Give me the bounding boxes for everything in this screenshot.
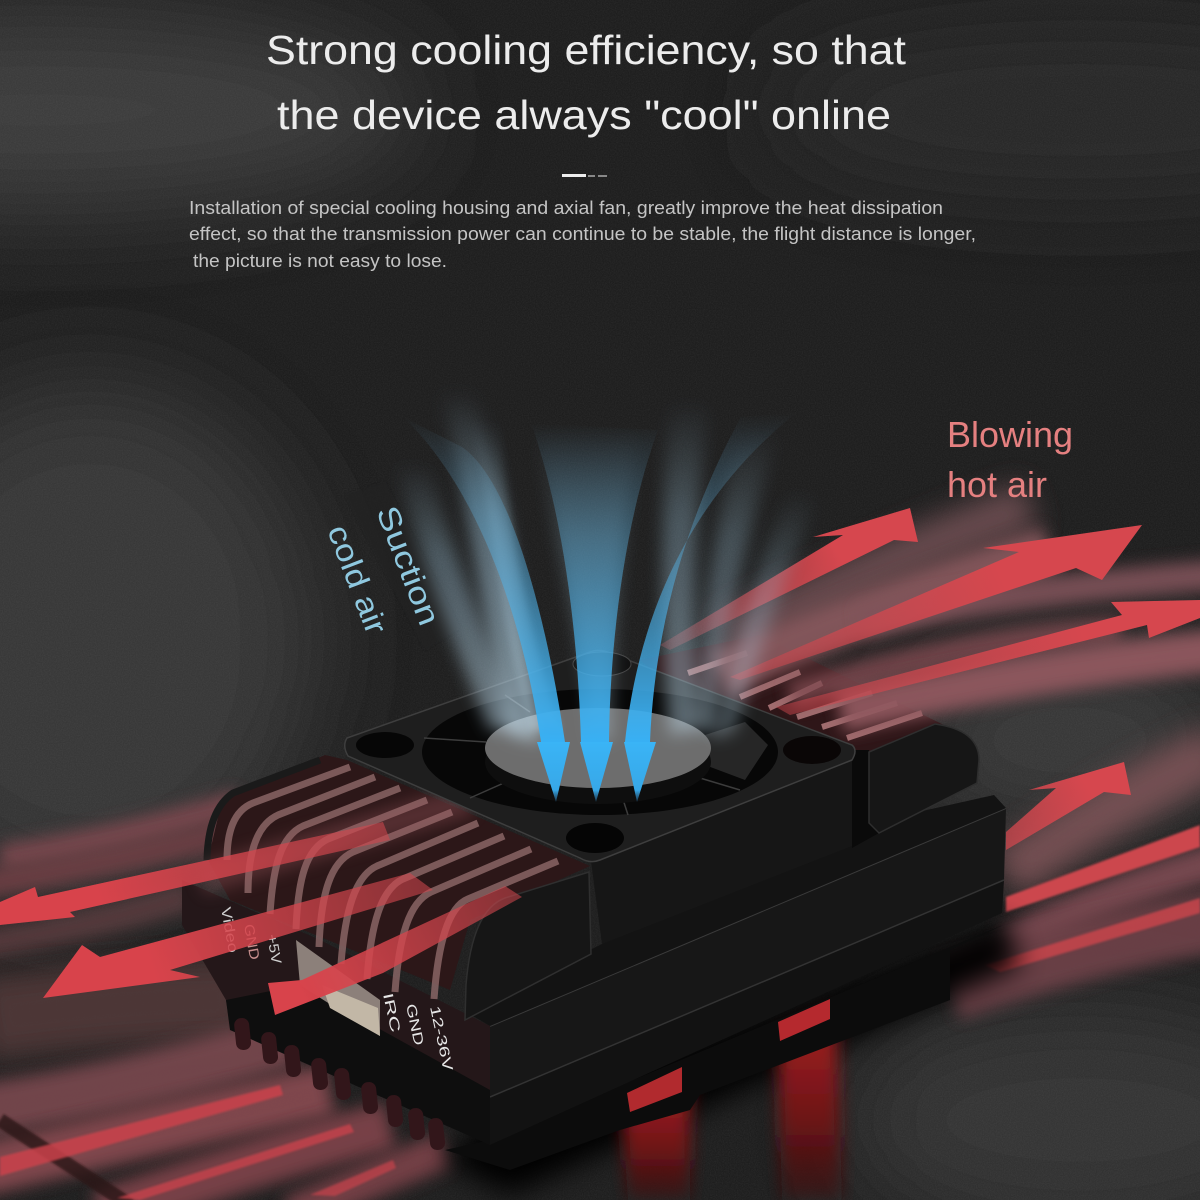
fan front side xyxy=(591,761,852,944)
left front face xyxy=(182,880,490,1151)
title xyxy=(266,27,907,138)
heatsink: back fins xyxy=(640,635,950,760)
side wall block xyxy=(465,872,591,1020)
port labels: IRC xyxy=(380,991,404,1034)
arrow: hot air left 3 xyxy=(268,886,522,1015)
arrow head middle xyxy=(580,742,613,802)
pink air veil over fins xyxy=(200,800,470,880)
arrow: hot air 3 xyxy=(776,600,1200,715)
rear rounded block xyxy=(869,724,979,833)
red glow: under pad 2 xyxy=(778,1010,842,1200)
description text xyxy=(189,197,976,271)
cold air flow: blue arrows xyxy=(403,413,796,802)
description text: effect, so that the transmission power can continue to be stable, the flight distance is longer, xyxy=(189,223,976,244)
arrow: hot air 2 xyxy=(730,525,1142,680)
arrow shaft middle xyxy=(531,423,658,742)
red glow: under pad 1 xyxy=(622,1080,690,1200)
red pad 2 xyxy=(778,999,830,1041)
suction cold air label xyxy=(320,501,447,639)
blowing hot air label xyxy=(947,414,1073,505)
connector xyxy=(296,940,380,1036)
streak: right lower 2 xyxy=(985,898,1200,972)
arrow head left xyxy=(537,742,570,802)
suction cold air label: Suction xyxy=(369,501,447,630)
front red arrows over fins xyxy=(0,822,522,1200)
label patch behind cold air text xyxy=(345,482,460,650)
back red air streaks xyxy=(0,505,1200,1200)
arrow: hot air 1 xyxy=(660,508,918,650)
blowing hot air label: Blowing xyxy=(947,414,1073,455)
title separator xyxy=(562,174,607,177)
port labels: +5V xyxy=(264,933,285,966)
streak: right lower 1 xyxy=(1006,825,1200,912)
arrow shaft right xyxy=(625,413,796,742)
hot air arrows: right side xyxy=(660,508,1200,972)
lower slab xyxy=(490,880,1004,1145)
port labels: 12-36V xyxy=(427,1004,457,1073)
fan top plate xyxy=(345,650,855,862)
blowing hot air label: hot air xyxy=(947,464,1047,505)
arrow head right xyxy=(624,742,656,802)
streak: lower left 1 xyxy=(0,1085,283,1176)
top deck xyxy=(466,795,1006,1026)
left rounded end fin xyxy=(207,760,320,860)
mounting holes xyxy=(356,732,414,758)
suction cold air label: cold air xyxy=(320,520,394,639)
cooling fan xyxy=(345,650,855,944)
device body xyxy=(443,724,1020,1200)
arrow: hot air left 1 xyxy=(0,822,390,925)
port labels: GND xyxy=(241,923,263,961)
upper slab xyxy=(490,808,1006,1097)
comb slots at bottom front xyxy=(233,1017,446,1151)
description text: the picture is not easy to lose. xyxy=(193,250,447,271)
streak: lower left 3 xyxy=(310,1160,396,1196)
arrow shaft left xyxy=(403,417,565,742)
title: Strong cooling efficiency, so that xyxy=(266,27,907,73)
arrow: hot air left 2 xyxy=(43,873,433,998)
underside xyxy=(445,925,1003,1170)
rear block gap xyxy=(852,750,879,848)
red pad 1 xyxy=(627,1067,682,1112)
arrow: hot air 4 xyxy=(1006,762,1131,850)
port labels: GND xyxy=(403,1002,427,1047)
heatsink: left fins xyxy=(200,755,590,999)
title: the device always "cool" online xyxy=(277,92,891,138)
port labels xyxy=(218,906,457,1073)
cold air flow: beams xyxy=(395,390,815,742)
streak: lower left 2 xyxy=(117,1124,354,1200)
description text: Installation of special cooling housing and axial fan, greatly improve the heat dissipation xyxy=(189,197,943,218)
fan hub xyxy=(485,720,711,804)
fan blades xyxy=(424,695,740,815)
under shadow xyxy=(443,920,1020,1195)
port labels: Video xyxy=(218,906,242,954)
fan opening xyxy=(422,689,778,815)
